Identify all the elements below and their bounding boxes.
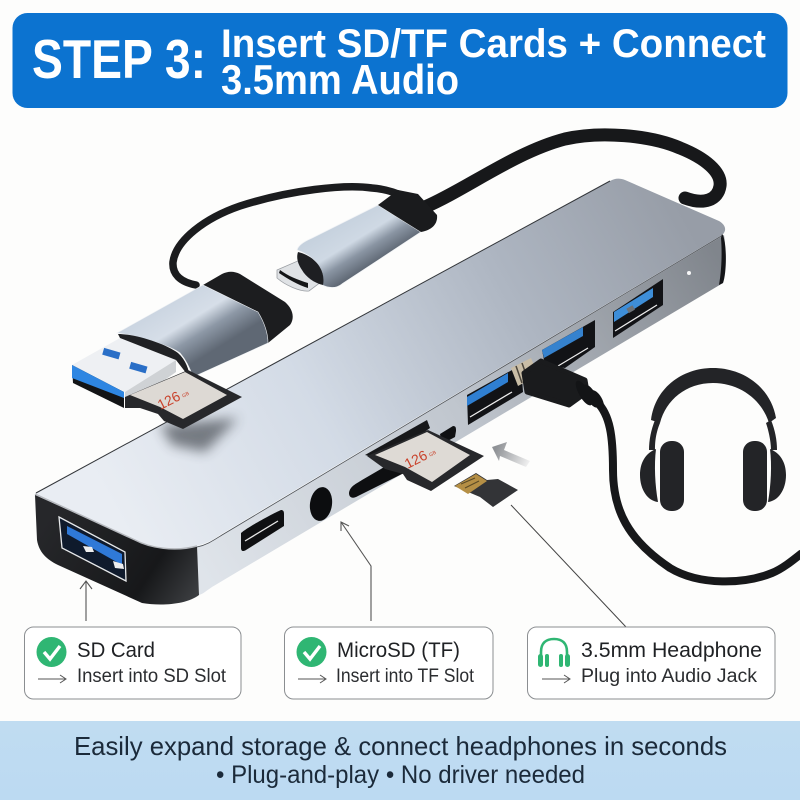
plug housing: [524, 361, 587, 405]
SD card at slot: [367, 430, 484, 491]
arrow: to SD card box: [80, 581, 92, 621]
port: USB-A 1: [467, 365, 523, 425]
card capacity: 126: [155, 388, 183, 413]
callout heading: 3.5mm Headphone: [581, 639, 762, 662]
port: TF slot: [349, 459, 410, 498]
leader line: headphone box to microSD card: [511, 505, 626, 627]
port: USB-A 3: [613, 279, 663, 338]
callout heading: SD Card: [77, 639, 155, 662]
port: USB-A 2: [542, 320, 595, 368]
hub side face: [197, 235, 725, 595]
USB-A lower shell: [125, 360, 176, 408]
icon: headphones: [640, 368, 786, 511]
callout: MicroSD: [284, 627, 493, 699]
USB-A metal tongue: [72, 338, 176, 392]
icon: arrow: [38, 675, 66, 683]
header title line 1: Insert SD/TF Cards + Connect: [221, 22, 766, 66]
port: USB-A on end cap: [59, 517, 126, 581]
callout text: Insert into TF Slot: [336, 666, 475, 687]
callout: SD Card: [24, 627, 241, 699]
SD card in USB adapter: [125, 370, 242, 429]
USB-C plug: [277, 190, 437, 291]
footer band: [0, 721, 800, 800]
USB-A contact holes: [102, 348, 120, 359]
blue tongue: [67, 526, 122, 565]
SD card in USB adapter: GB: [181, 391, 191, 399]
icon: green check: [36, 637, 66, 667]
card label: [375, 432, 470, 482]
microSD card: [454, 473, 518, 507]
icon: green check: [296, 637, 326, 667]
icon: green headphones: [538, 639, 570, 667]
hub far end strip: [719, 234, 726, 285]
arrow: grey insert arrow: [492, 442, 530, 467]
LED indicator: [687, 271, 691, 275]
callout text: Plug into Audio Jack: [581, 666, 758, 687]
USB-C black collar: [378, 190, 437, 232]
USB-A black collar: [203, 272, 293, 343]
jack plug and headphone cable: [511, 358, 800, 581]
icon: arrow: [298, 675, 326, 683]
metal jack pin: [511, 358, 538, 386]
port: 3.5mm audio jack: [308, 486, 334, 522]
callout heading: MicroSD (TF): [337, 639, 460, 662]
port: small slot next to SD: [440, 426, 456, 444]
USB-C metal tip: [277, 260, 333, 291]
shadow of SD card on hub: [160, 418, 238, 452]
hub body: [35, 179, 726, 604]
hub back edge: [36, 181, 610, 493]
callout text: Insert into SD Slot: [77, 666, 227, 687]
port: SD slot: [365, 420, 430, 460]
footer line 2: • Plug-and-play • No driver needed: [216, 761, 585, 789]
icon: arrow: [542, 675, 570, 683]
footer line 1: Easily expand storage & connect headphones in seconds: [74, 731, 727, 761]
USB-C metal body: [297, 205, 421, 288]
cable: USB-A branch: [173, 187, 405, 285]
header title line 2: 3.5mm Audio: [221, 56, 459, 103]
hub near end cap: [35, 495, 199, 604]
callout: 3.5mm Headphone: [528, 627, 775, 699]
cable: main hub cable: [425, 135, 720, 207]
header banner: [12, 13, 788, 108]
SD card at slot: GB: [428, 450, 438, 458]
USB-A metal body: [117, 285, 268, 377]
card capacity: 126: [402, 447, 430, 472]
hub top face: [35, 179, 725, 548]
card label: [130, 372, 227, 419]
USB-A blue edge: [72, 365, 124, 398]
USB-A plug: [72, 272, 293, 408]
USB-A front lower black: [72, 365, 124, 408]
cable to headphones: [597, 402, 800, 581]
arrow: to microSD box: [341, 522, 371, 621]
header label: step number: STEP 3:: [32, 28, 206, 90]
port: USB-C: [241, 510, 284, 551]
plug strain relief: [573, 378, 607, 412]
hub front edge: [197, 235, 723, 547]
